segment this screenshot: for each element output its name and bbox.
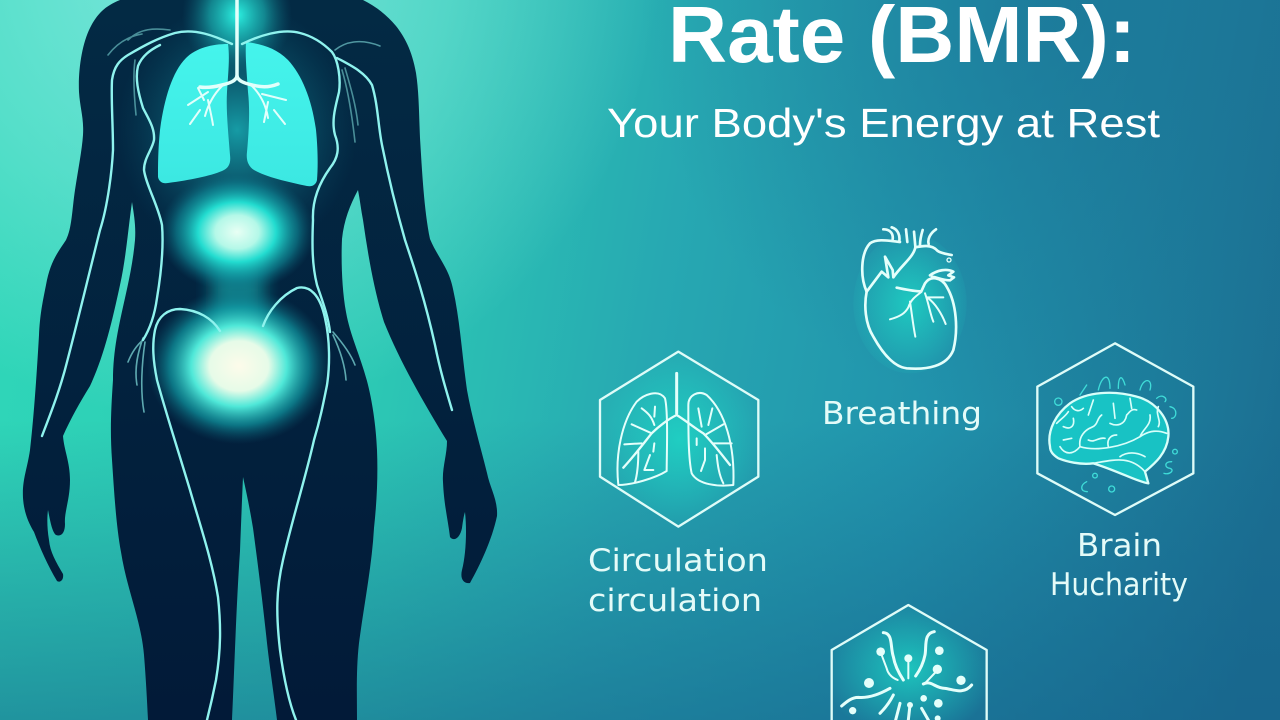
lungs <box>158 42 318 186</box>
human body figure <box>23 0 497 720</box>
icon: brain in hexagon <box>1037 343 1193 515</box>
subtitle: Your Body's Energy at Rest <box>607 100 1161 146</box>
label: circulation <box>588 543 768 619</box>
chest and core glows <box>117 0 357 444</box>
label: circulation: Circulation <box>588 543 768 579</box>
icon: lungs in hexagon <box>600 352 758 527</box>
body silhouette <box>23 0 497 720</box>
bronchial tree <box>188 0 286 125</box>
label: circulation: circulation <box>588 583 762 619</box>
body energy veins <box>42 29 452 720</box>
label: brain <box>1050 528 1188 603</box>
icon: heart <box>853 227 967 373</box>
label: brain: Hucharity <box>1050 567 1188 603</box>
icon: nerve network in hexagon <box>832 605 987 720</box>
label: breathing: Breathing <box>822 396 982 432</box>
label: brain: Brain <box>1077 528 1162 564</box>
